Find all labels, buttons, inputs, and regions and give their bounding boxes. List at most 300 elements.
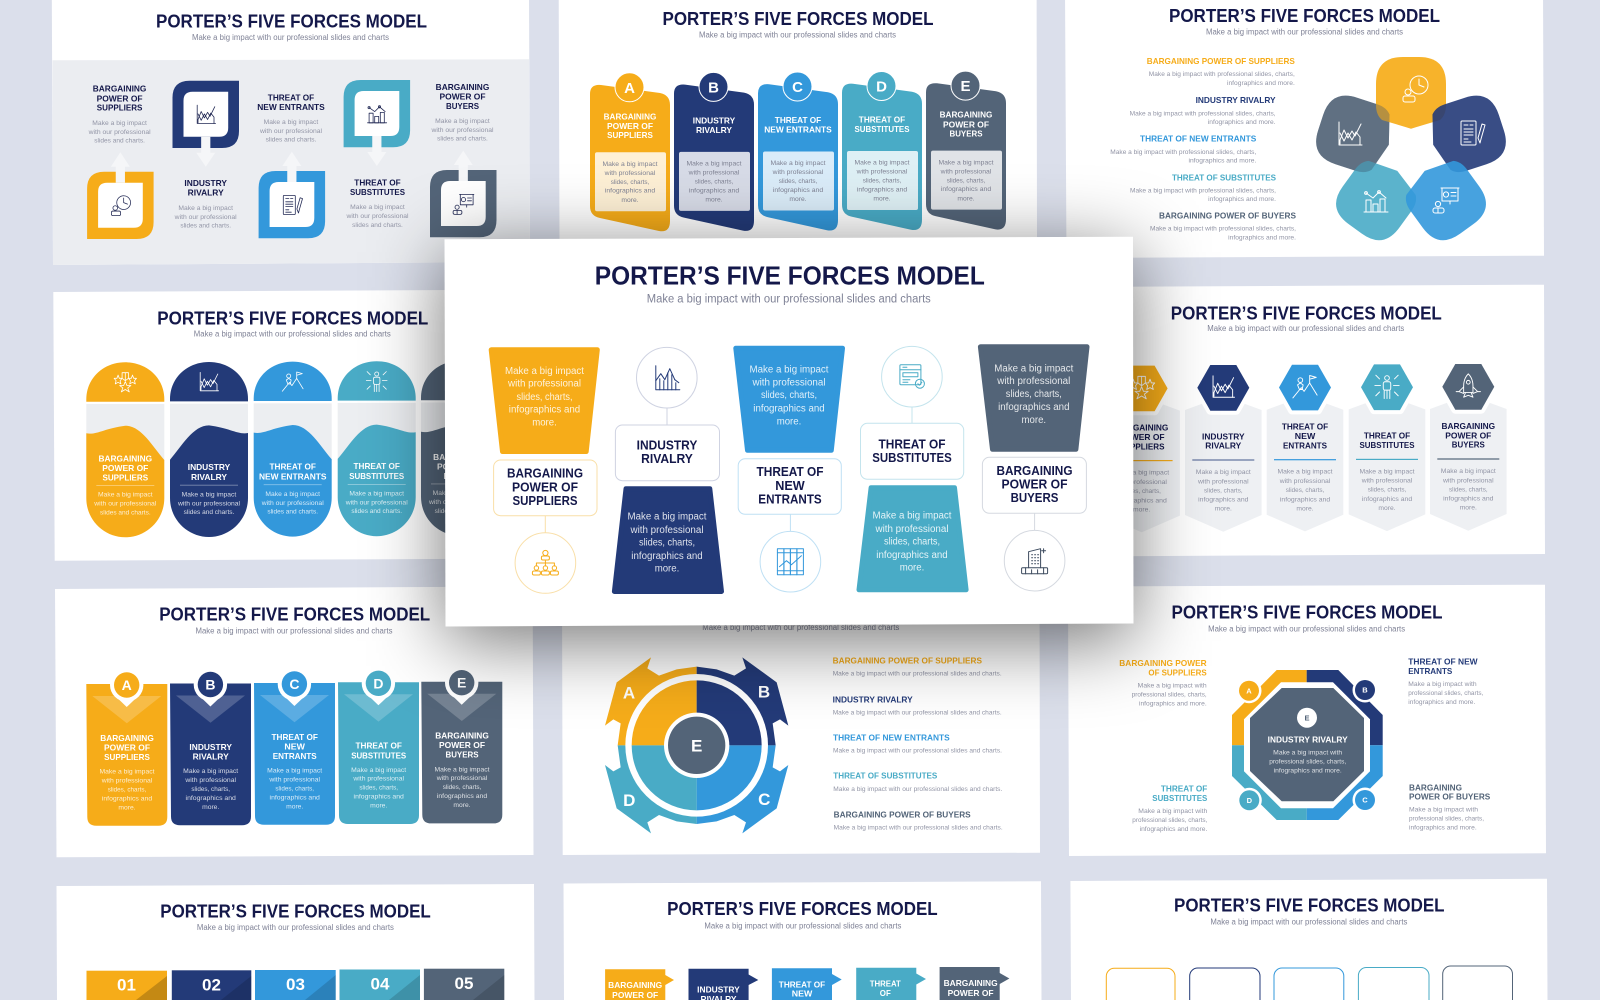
card A: bargaining power of suppliers: slides, charts, xyxy=(611,179,649,186)
subtitle: Make a big impact with our professional slides and charts xyxy=(702,623,899,632)
icon circle: chart xyxy=(636,347,697,408)
column E: buyers xyxy=(421,666,502,823)
column: suppliers: Make a big impact xyxy=(98,492,153,499)
column D: substitutes: with professional xyxy=(352,776,405,783)
column: buyers: infographics and xyxy=(1443,496,1494,503)
column: buyers: slides, charts, xyxy=(1449,486,1488,493)
list item: new entrants: Make a big impact with professional slides, charts, xyxy=(1110,149,1256,156)
octagon diagram xyxy=(1232,670,1383,820)
list item: new entrants: infographics and more. xyxy=(1188,158,1256,165)
label xyxy=(872,436,952,465)
list item: buyers: Make a big impact with professional slides, charts, xyxy=(1150,226,1296,233)
icon circle: web window xyxy=(882,346,942,407)
subtitle: Make a big impact with our professional slides and charts xyxy=(192,33,389,42)
label xyxy=(507,466,583,508)
card E: bargaining power of buyers: Make a big impact xyxy=(938,159,994,166)
column D: substitutes: D xyxy=(373,675,383,691)
column C: new entrants: NEW xyxy=(284,742,305,751)
column: buyers: Make a big impact xyxy=(433,490,487,497)
list item: buyers: infographics and more. xyxy=(1228,234,1296,241)
text: top left: OF SUPPLIERS xyxy=(1148,668,1207,677)
title: PORTER’S FIVE FORCES MODEL xyxy=(160,902,431,922)
column D: substitutes: slides, charts, xyxy=(359,785,398,792)
list item: rivalry xyxy=(833,695,1002,716)
text: top left: infographics and more. xyxy=(1139,700,1207,707)
card C: threat of new entrants: THREAT OF xyxy=(775,116,821,125)
column: new entrants: ENTRANTS xyxy=(1283,441,1328,450)
icon circle: books xyxy=(760,531,821,592)
list item: substitutes xyxy=(833,772,1002,793)
column B: rivalry: with professional xyxy=(184,777,237,784)
column E: buyers: more. xyxy=(453,802,471,809)
column C: new entrants: with professional xyxy=(268,776,321,783)
octagon diagram: infographics and more. xyxy=(1274,768,1342,775)
column: new entrants: slides and charts. xyxy=(267,509,318,516)
text: bottom left: professional slides, charts, xyxy=(1132,817,1207,824)
column: substitutes: THREAT OF xyxy=(1364,432,1410,441)
column: new entrants xyxy=(1267,365,1343,531)
column B: rivalry: more. xyxy=(202,804,219,811)
column: buyers: with professional xyxy=(1442,477,1494,484)
text: threat of substitutes: with our professional xyxy=(345,213,409,220)
card A: bargaining power of suppliers: with professional xyxy=(604,170,656,177)
list item: new entrants: Make a big impact with our professional slides and charts. xyxy=(833,748,1002,755)
column 2: industry rivalry xyxy=(614,347,722,592)
description text: slides, charts, xyxy=(884,537,940,548)
text: bottom right: Make a big impact with xyxy=(1409,807,1478,814)
description block xyxy=(859,488,966,590)
card B: industry rivalry: with professional xyxy=(688,170,740,177)
tag: rivalry: INDUSTRY xyxy=(697,986,740,995)
text: industry rivalry: RIVALRY xyxy=(188,189,224,198)
block 01: 01 xyxy=(117,976,136,995)
column: substitutes: slides, charts, xyxy=(1368,487,1406,494)
block 05 xyxy=(424,969,504,1000)
label box xyxy=(860,423,964,479)
column: buyers: POWER OF xyxy=(1445,431,1491,440)
column: buyers: POWER OF xyxy=(437,462,483,471)
column B: rivalry: Make a big impact xyxy=(183,768,238,775)
text: bottom left: THREAT OF xyxy=(1161,785,1207,794)
column 3: threat of new entrants xyxy=(736,348,842,592)
card B: industry rivalry: Make a big impact xyxy=(686,161,742,168)
octagon diagram: D xyxy=(1247,796,1253,805)
text: top left xyxy=(1119,659,1207,707)
list item: substitutes: THREAT OF SUBSTITUTES xyxy=(1172,173,1277,182)
column A: suppliers: A xyxy=(122,677,132,693)
column E: buyers: with professional xyxy=(436,775,488,782)
card A: bargaining power of suppliers: POWER OF xyxy=(607,122,653,131)
description text: with professional xyxy=(752,377,826,388)
text: bottom right: infographics and more. xyxy=(1409,825,1477,832)
column: new entrants: with professional xyxy=(1279,478,1331,485)
description text: more. xyxy=(532,418,557,429)
column: suppliers: POWER OF xyxy=(1119,433,1165,442)
subtitle: Make a big impact with our professional slides and charts xyxy=(699,30,896,39)
tag: buyers xyxy=(940,967,1009,1000)
column: suppliers: infographics and xyxy=(1116,497,1167,504)
column: suppliers: Make a big impact xyxy=(1114,470,1169,477)
octagon diagram: A xyxy=(1246,686,1252,695)
card E: bargaining power of buyers: with professional xyxy=(940,168,992,175)
slide background xyxy=(56,884,534,1000)
slide background xyxy=(559,0,1037,240)
title: PORTER’S FIVE FORCES MODEL xyxy=(159,605,430,625)
column: suppliers: with our professional xyxy=(93,501,157,508)
list item: buyers: BARGAINING POWER OF BUYERS xyxy=(834,810,971,819)
column: rivalry: RIVALRY xyxy=(1205,442,1242,451)
column A: suppliers: slides, charts, xyxy=(108,786,146,793)
subtitle: Make a big impact with our professional slides and charts xyxy=(1210,917,1407,926)
label: NEW xyxy=(775,478,805,493)
column: rivalry xyxy=(170,362,248,537)
description text xyxy=(505,366,584,429)
column A: suppliers: Make a big impact xyxy=(100,769,155,776)
text: threat of new entrants: THREAT OF xyxy=(268,94,314,103)
label: THREAT OF xyxy=(878,436,946,451)
text: bargaining power of buyers: Make a big impact xyxy=(435,118,490,125)
card A: bargaining power of suppliers: SUPPLIERS xyxy=(607,131,653,140)
text: industry rivalry: with our professional xyxy=(174,214,237,221)
list item: substitutes: Make a big impact with our professional slides and charts. xyxy=(833,786,1002,793)
column B: rivalry: infographics and xyxy=(186,795,236,802)
card C: threat of new entrants: Make a big impact xyxy=(770,160,826,167)
wheel letters: D xyxy=(623,791,635,810)
octagon diagram: Make a big impact with xyxy=(1273,750,1343,757)
text: bargaining power of buyers: BUYERS xyxy=(446,102,480,111)
column: rivalry: more. xyxy=(1215,506,1232,513)
outlined card 2 xyxy=(1190,968,1260,1000)
label: RIVALRY xyxy=(641,451,693,466)
label box xyxy=(982,457,1086,513)
slide background xyxy=(444,237,1134,626)
column: suppliers: slides, charts, xyxy=(1122,488,1161,495)
wheel letters: A xyxy=(623,683,635,702)
slide: domes and wave panels xyxy=(53,290,532,561)
column: suppliers xyxy=(1103,366,1180,532)
card E: bargaining power of buyers: POWER OF xyxy=(943,120,989,129)
title: PORTER’S FIVE FORCES MODEL xyxy=(595,260,985,290)
description block xyxy=(614,489,722,592)
text: top right: infographics and more. xyxy=(1408,699,1475,706)
column: buyers: slides and charts. xyxy=(435,508,486,515)
card B: industry rivalry: INDUSTRY xyxy=(693,116,736,125)
column: substitutes: slides and charts. xyxy=(351,508,402,515)
slide: arrow tags xyxy=(564,881,1042,1000)
list item: suppliers: Make a big impact with professional slides, charts, xyxy=(1149,71,1295,78)
column: buyers xyxy=(1430,364,1507,531)
column: buyers: with our professional xyxy=(428,499,492,506)
slide: pin badge columns xyxy=(55,586,534,857)
column: buyers: BUYERS xyxy=(444,472,477,481)
wheel letters: C xyxy=(758,790,770,809)
slide: hexagon columns xyxy=(1066,285,1545,556)
list item: buyers: BARGAINING POWER OF BUYERS xyxy=(1159,212,1297,221)
description text: infographics and xyxy=(876,550,948,561)
column: buyers: Make a big impact xyxy=(1441,468,1496,475)
subtitle: Make a big impact with our professional slides and charts xyxy=(1208,624,1405,633)
description block xyxy=(491,350,597,452)
column C: new entrants: slides, charts, xyxy=(275,785,314,792)
label: ENTRANTS xyxy=(758,491,822,506)
tag: new entrants xyxy=(772,968,842,1000)
block 01 xyxy=(86,971,167,1000)
card A: bargaining power of suppliers xyxy=(590,73,670,231)
description text: more. xyxy=(1022,415,1046,426)
card D: threat of substitutes: infographics and xyxy=(857,186,907,193)
column C: new entrants: THREAT OF xyxy=(272,733,318,742)
label xyxy=(637,437,698,466)
card B: industry rivalry xyxy=(674,72,754,231)
column: suppliers: BARGAINING xyxy=(98,455,152,464)
column: new entrants: infographics and xyxy=(1280,496,1330,503)
grey content band xyxy=(52,59,530,265)
outlined card 3 xyxy=(1274,968,1344,1000)
text: threat of substitutes xyxy=(345,178,409,229)
slide background xyxy=(1068,585,1546,856)
slide: five petals with list xyxy=(1065,0,1544,258)
icon circle: building xyxy=(1004,530,1065,591)
column: substitutes xyxy=(1349,364,1425,531)
column: new entrants: more. xyxy=(1296,505,1314,512)
label: SUPPLIERS xyxy=(512,493,578,508)
column C: new entrants: C xyxy=(289,676,299,692)
card C: threat of new entrants: NEW ENTRANTS xyxy=(764,125,832,134)
column: new entrants: with our professional xyxy=(261,500,324,507)
tag: new entrants: NEW xyxy=(792,990,813,998)
column: suppliers: POWER OF xyxy=(102,464,148,473)
text: threat of new entrants: Make a big impact xyxy=(264,119,318,126)
column B: rivalry: INDUSTRY xyxy=(189,743,232,752)
card E: bargaining power of buyers: slides, charts, xyxy=(947,177,985,184)
column D: substitutes: more. xyxy=(370,803,387,810)
title: PORTER’S FIVE FORCES MODEL xyxy=(157,308,428,328)
description text: with professional xyxy=(996,376,1070,387)
column: rivalry: Make a big impact xyxy=(182,491,236,498)
card D: threat of substitutes: with professional xyxy=(856,169,908,176)
column: new entrants: THREAT OF xyxy=(269,463,316,472)
description text xyxy=(750,365,829,427)
text: industry rivalry: INDUSTRY xyxy=(184,179,227,188)
connector xyxy=(1034,513,1036,530)
octagon diagram: professional slides, charts, xyxy=(1269,759,1346,766)
slide: lettered slanted cards xyxy=(559,0,1037,240)
list item: buyers xyxy=(1150,212,1297,241)
text: bargaining power of buyers: with our professional xyxy=(430,127,494,134)
column: rivalry: infographics and xyxy=(1198,497,1249,504)
description text xyxy=(628,512,707,575)
card: industry rivalry xyxy=(172,81,239,167)
tag: suppliers xyxy=(605,969,674,1000)
column: buyers: BUYERS xyxy=(1452,441,1485,450)
text: bargaining power of suppliers: with our professional xyxy=(88,129,151,136)
wheel diagram xyxy=(605,657,788,833)
description text: Make a big impact xyxy=(628,512,707,523)
list item: substitutes: THREAT OF SUBSTITUTES xyxy=(833,772,938,781)
card B: industry rivalry: slides, charts, xyxy=(695,179,733,186)
list item: suppliers: BARGAINING POWER OF SUPPLIERS xyxy=(1147,57,1295,66)
block 05: 05 xyxy=(455,974,473,993)
column: substitutes: infographics and xyxy=(1362,496,1412,503)
list item: rivalry xyxy=(1130,96,1276,126)
text: top right: Make a big impact with xyxy=(1408,681,1477,688)
card: bargaining power of buyers xyxy=(430,151,496,237)
connector xyxy=(544,516,546,533)
column E: buyers: BARGAINING xyxy=(435,732,489,741)
list item: rivalry: INDUSTRY RIVALRY xyxy=(1196,96,1276,105)
description text: infographics and xyxy=(998,402,1070,413)
label: POWER OF xyxy=(1002,477,1068,492)
slide background xyxy=(1065,0,1544,258)
description text: infographics and xyxy=(631,551,703,562)
octagon diagram: C xyxy=(1362,796,1368,805)
tag: suppliers: BARGAINING xyxy=(608,981,662,990)
octagon diagram: INDUSTRY RIVALRY xyxy=(1268,735,1348,744)
card B: industry rivalry: B xyxy=(708,79,719,96)
card C: threat of new entrants: more. xyxy=(789,196,807,203)
description text: slides, charts, xyxy=(1006,389,1062,400)
text: top right: professional slides, charts, xyxy=(1408,690,1483,697)
description text: slides, charts, xyxy=(761,390,817,401)
tag: buyers: BARGAINING xyxy=(944,979,998,988)
text: bargaining power of suppliers xyxy=(88,85,151,145)
text: threat of substitutes: SUBSTITUTES xyxy=(350,188,406,197)
column: rivalry: INDUSTRY xyxy=(188,463,231,472)
card A: bargaining power of suppliers: BARGAINING xyxy=(604,112,656,121)
column: rivalry: with professional xyxy=(1197,478,1249,485)
text: threat of new entrants xyxy=(257,94,325,144)
card E: bargaining power of buyers: BUYERS xyxy=(950,129,983,138)
column: rivalry: slides, charts, xyxy=(1204,487,1243,494)
card A: bargaining power of suppliers: infographics and xyxy=(605,188,655,195)
connector xyxy=(666,408,668,425)
column C: new entrants: Make a big impact xyxy=(267,768,322,775)
wheel letters: E xyxy=(691,736,702,756)
subtitle: Make a big impact with our professional slides and charts xyxy=(197,923,394,932)
card D: threat of substitutes: slides, charts, xyxy=(863,178,901,185)
center slide drop shadow xyxy=(445,252,1133,641)
column D: substitutes: infographics and xyxy=(354,794,404,801)
block 03 xyxy=(255,970,336,1000)
column: buyers: more. xyxy=(1460,505,1477,512)
title: PORTER’S FIVE FORCES MODEL xyxy=(1172,603,1442,623)
column: new entrants: Make a big impact xyxy=(265,491,320,498)
text: top left: BARGAINING POWER xyxy=(1119,659,1207,668)
column: rivalry: RIVALRY xyxy=(191,473,228,482)
list item: suppliers: infographics and more. xyxy=(1227,80,1295,87)
label: BARGAINING xyxy=(996,463,1072,478)
column B: rivalry: RIVALRY xyxy=(193,752,229,762)
column 4: threat of substitutes xyxy=(859,346,966,590)
card B: industry rivalry: RIVALRY xyxy=(696,126,733,135)
text: top left: professional slides, charts, xyxy=(1132,691,1207,698)
description text: Make a big impact xyxy=(872,511,952,522)
column E: buyers: E xyxy=(457,675,466,691)
column E: buyers: infographics and xyxy=(437,793,487,800)
slide: circular arrows xyxy=(562,585,1040,855)
column B: rivalry: B xyxy=(205,676,215,692)
column: substitutes: more. xyxy=(1378,505,1396,512)
card D: threat of substitutes: SUBSTITUTES xyxy=(854,125,910,134)
text: threat of substitutes: Make a big impact xyxy=(350,204,405,211)
text: bottom right: professional slides, charts, xyxy=(1409,816,1484,823)
column: rivalry: INDUSTRY xyxy=(1202,432,1245,441)
card B: industry rivalry: more. xyxy=(705,197,723,204)
column: rivalry: with our professional xyxy=(177,500,241,507)
label xyxy=(756,464,824,506)
column A: suppliers: infographics and xyxy=(102,795,152,802)
column C: new entrants xyxy=(254,667,335,825)
description text xyxy=(994,363,1074,426)
card D: threat of substitutes: more. xyxy=(873,196,891,203)
list item: rivalry: infographics and more. xyxy=(1208,119,1276,126)
column A: suppliers xyxy=(86,668,167,826)
slide: outlined cards xyxy=(1070,879,1548,1000)
column: suppliers: more. xyxy=(1133,506,1150,513)
description text: more. xyxy=(777,416,801,427)
description text: Make a big impact xyxy=(505,366,584,377)
center slide xyxy=(444,237,1134,626)
list item: substitutes: infographics and more. xyxy=(1208,196,1276,203)
card D: threat of substitutes: THREAT OF xyxy=(859,115,905,124)
column: substitutes xyxy=(338,361,416,536)
list item: substitutes xyxy=(1130,173,1277,203)
column: rivalry: slides and charts. xyxy=(184,509,235,516)
tag: buyers: POWER OF xyxy=(948,989,994,998)
text: bottom right: POWER OF BUYERS xyxy=(1409,793,1491,802)
card B: industry rivalry: infographics and xyxy=(689,187,739,194)
card C: threat of new entrants xyxy=(758,72,838,230)
column E: buyers: POWER OF xyxy=(439,741,485,750)
text: bargaining power of buyers: slides and charts. xyxy=(437,136,488,143)
description block xyxy=(980,347,1087,449)
slide: octagon xyxy=(1068,585,1546,856)
connector xyxy=(789,514,791,531)
text: bargaining power of buyers: BARGAINING xyxy=(436,83,489,92)
list item: new entrants xyxy=(833,733,1002,755)
slide background xyxy=(53,290,532,561)
column: suppliers: BARGAINING xyxy=(1115,424,1168,433)
card: threat of substitutes xyxy=(344,80,410,166)
text: threat of new entrants: slides and charts. xyxy=(266,137,317,144)
octagon diagram: B xyxy=(1362,686,1368,695)
outlined card 4 xyxy=(1358,968,1429,1000)
text: bottom right xyxy=(1409,783,1491,832)
column A: suppliers: with professional xyxy=(101,777,153,784)
text: top right: ENTRANTS xyxy=(1408,667,1453,676)
card: bargaining power of suppliers xyxy=(87,152,154,239)
description text: more. xyxy=(900,563,924,574)
card C: threat of new entrants: slides, charts, xyxy=(779,178,817,185)
column E: buyers: BUYERS xyxy=(445,751,479,760)
label: BARGAINING xyxy=(507,466,583,481)
list item: suppliers xyxy=(833,657,1002,678)
column C: new entrants: more. xyxy=(286,803,303,810)
tag: substitutes: THREAT xyxy=(870,980,901,989)
slide: arrows and rounded cards xyxy=(52,0,530,265)
description text xyxy=(872,511,952,574)
description block xyxy=(736,348,842,450)
list item: suppliers: BARGAINING POWER OF SUPPLIERS xyxy=(833,657,983,666)
slide background xyxy=(1066,285,1545,556)
title: PORTER’S FIVE FORCES MODEL xyxy=(1171,303,1442,323)
slide background xyxy=(1070,879,1548,1000)
petal diagram xyxy=(1310,57,1512,249)
column: new entrants xyxy=(254,362,332,537)
description text: slides, charts, xyxy=(639,538,695,549)
octagon diagram: E xyxy=(1304,713,1310,722)
title: PORTER’S FIVE FORCES MODEL xyxy=(156,12,427,32)
